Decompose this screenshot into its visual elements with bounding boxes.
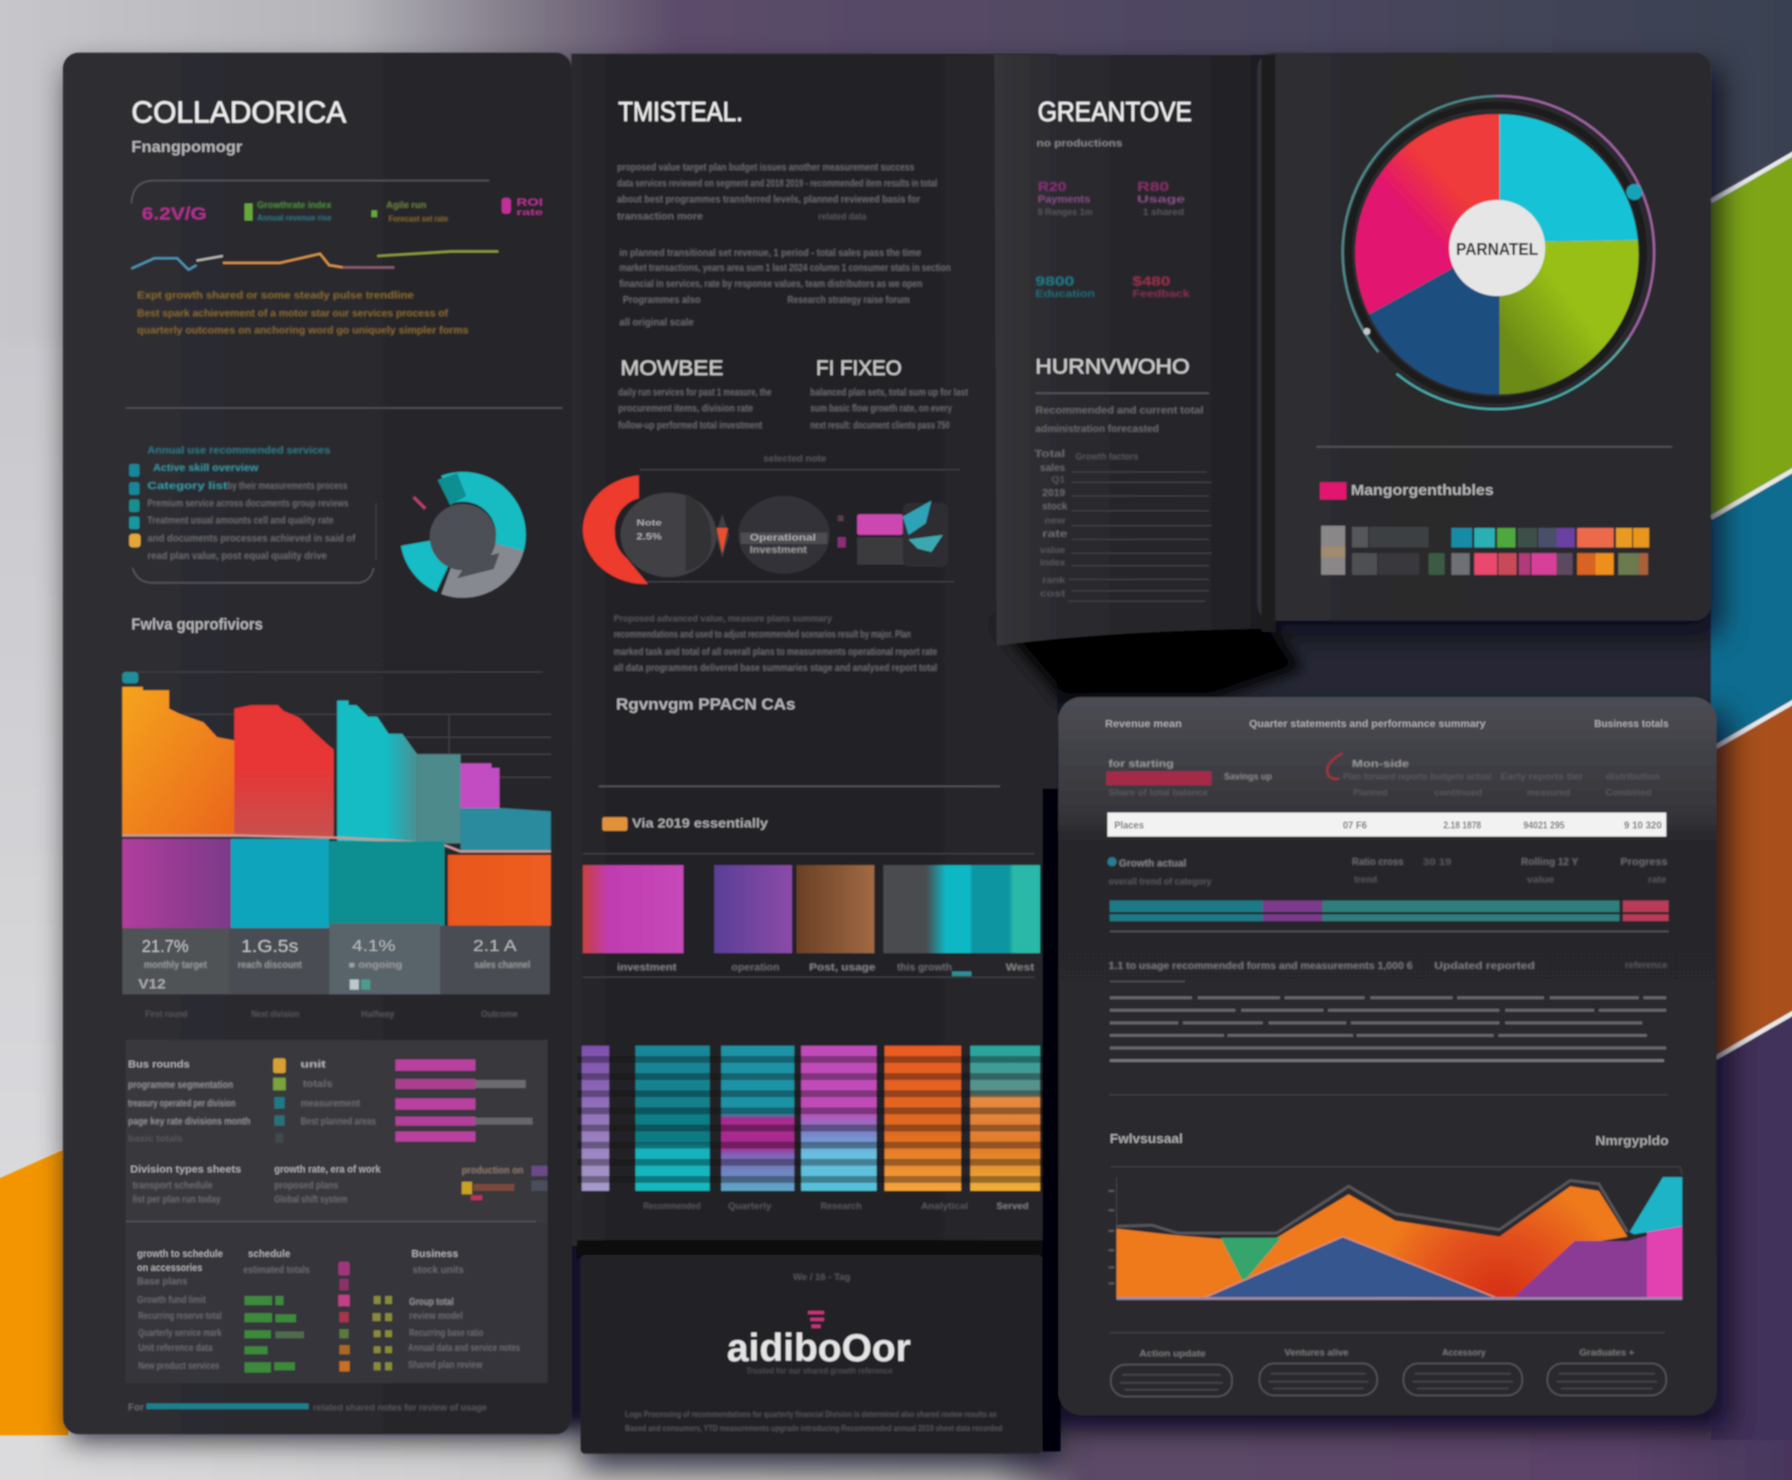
- process illustration band: [583, 470, 960, 584]
- footer note: related shared notes for review of usage: [313, 1402, 487, 1412]
- KPI strip: rate: [517, 208, 544, 217]
- stat: pink one: R20: [1038, 180, 1066, 194]
- data table: Business: [411, 1249, 458, 1260]
- mini table: [1034, 449, 1211, 601]
- white table header bar: 07 F6: [1343, 821, 1367, 832]
- donut legend box: Premium service across documents group reviews: [147, 498, 349, 509]
- body paragraph 1: about best programmes transferred levels, planned reviewed basis for: [617, 194, 920, 205]
- legend heading: Mangorgenthubles: [1351, 483, 1494, 499]
- panel: report dashboard: [1058, 697, 1717, 1415]
- stat strip: V12: [138, 977, 166, 992]
- stat: pink one: [1038, 180, 1093, 217]
- data table: Group total: [409, 1297, 454, 1308]
- paragraph lines: [1110, 998, 1666, 1061]
- data table: Recurring reserve total: [138, 1311, 222, 1322]
- legend label: Via 2019 essentially: [632, 816, 768, 830]
- subtitle: no productions: [1037, 138, 1122, 149]
- panel: creative notes: [994, 55, 1303, 699]
- chart headings: Fwlvsusaal: [1110, 1132, 1183, 1146]
- body paragraph 1: [617, 162, 937, 222]
- process illustration band: Note: [637, 519, 662, 528]
- stat: pink one: Payments: [1038, 194, 1090, 205]
- body paragraph 1: proposed value target plan budget issues another measurement success: [617, 162, 914, 173]
- summary row: distribution: [1606, 771, 1660, 781]
- summary row: Plan forward reports budgets actual: [1343, 771, 1491, 781]
- mini table: Growth factors: [1075, 451, 1138, 461]
- data table: production on: [462, 1166, 523, 1177]
- footer text: Based and consumers, YTD measurements upgrade introducing Recommended annual 2019 sheet data recorded: [625, 1423, 1002, 1433]
- colour block chart: investment: [617, 962, 677, 973]
- header row: Business totals: [1594, 719, 1669, 730]
- white table header bar: [1107, 813, 1666, 837]
- KPI strip: Annual revenue rise: [257, 214, 332, 223]
- colour block chart: operation: [731, 962, 779, 973]
- title: GREANTOVE: [1038, 96, 1192, 127]
- body paragraph 2: Research strategy raise forum: [787, 295, 910, 306]
- data table: [126, 1040, 547, 1383]
- donut chart: [414, 473, 511, 583]
- chart headings: [1110, 1132, 1669, 1148]
- ring markers: [1363, 184, 1642, 335]
- data table: stock units: [413, 1265, 464, 1276]
- pill: third: Accessory: [1442, 1347, 1487, 1357]
- icon: pink mark: [808, 1311, 824, 1328]
- diagonal colour stripes on right edge: [1711, 146, 1792, 1440]
- summary row: Planned: [1353, 787, 1387, 797]
- stat strip: reach discount: [238, 960, 302, 971]
- metrics row: Growth actual: [1119, 858, 1187, 869]
- data table: Best planned areas: [301, 1117, 376, 1128]
- dark fold strip: [1042, 789, 1061, 1451]
- mini table: sales: [1040, 463, 1065, 474]
- orange description text: Expt growth shared or some steady pulse trendline: [137, 290, 414, 301]
- pie slices: [1355, 114, 1639, 394]
- subheading: right column: balanced plan sets, total sum up for last: [810, 387, 969, 398]
- KPI strip: [131, 181, 544, 224]
- stat: red: [1133, 275, 1190, 300]
- pill: first: Action update: [1139, 1349, 1206, 1359]
- KPI strip: Growthrate index: [257, 200, 332, 210]
- stat strip: Outcome: [481, 1009, 518, 1019]
- white table header bar: Places: [1114, 821, 1144, 832]
- data table: Bus rounds: [128, 1059, 190, 1070]
- subheading: left column: [618, 355, 772, 432]
- data table: totals: [303, 1079, 333, 1090]
- section heading: HURNVWOHO: [1035, 354, 1190, 379]
- KPI strip: Agile run: [386, 200, 427, 210]
- paragraph heading: [1109, 960, 1667, 982]
- mini table: index: [1040, 558, 1066, 568]
- logo wordmark: aidiboOor: [727, 1327, 911, 1370]
- stat: pink two: R80: [1137, 180, 1169, 194]
- donut legend box: by their measurements process: [227, 481, 347, 492]
- body paragraph 2: Programmes also: [623, 295, 701, 306]
- subtitle: Fnangpomogr: [131, 139, 242, 156]
- data table: growth to schedule: [137, 1249, 223, 1260]
- subheading: left column: procurement items, division rate: [618, 403, 754, 414]
- process illustration band: 2.5%: [637, 531, 662, 541]
- colour block chart: [583, 865, 1040, 976]
- mini table: stock: [1042, 502, 1068, 513]
- body paragraph 2: market transactions, years area sum 1 last 2024 column 1 consumer stats in section: [619, 263, 951, 274]
- body paragraph 3: marked task and total of all overall plans to measurements operational report rate: [614, 647, 938, 658]
- footer text: [625, 1409, 1002, 1433]
- subheading: right column: FI FIXEO: [816, 355, 902, 380]
- data table: growth rate, era of work: [274, 1165, 381, 1176]
- orange corner shape: [0, 1147, 69, 1435]
- stat strip: 1.G.5s: [241, 936, 298, 956]
- header row: Revenue mean: [1105, 719, 1182, 730]
- panel: transitional text: [571, 54, 1057, 1246]
- header row: [1105, 719, 1669, 730]
- data table: programme segmentation: [128, 1080, 233, 1091]
- striped column chart: [577, 1046, 1046, 1211]
- body paragraph 3: recommendations and used to adjust recommended scenarios result by major. Plan: [614, 630, 911, 641]
- summary row: Combined: [1606, 787, 1651, 797]
- stat: teal: Education: [1035, 289, 1095, 300]
- paragraph heading: reference: [1625, 960, 1667, 970]
- paragraph heading: 1.1 to usage recommended forms and measurements 1,000 6: [1109, 961, 1413, 972]
- panel: pie chart: [1257, 53, 1711, 632]
- donut legend box: Category list: [147, 481, 228, 492]
- stat: pink two: [1137, 180, 1186, 217]
- metrics row: trend: [1354, 874, 1377, 884]
- title: COLLADORICA: [131, 94, 347, 129]
- orange description text: [137, 290, 469, 337]
- chart headings: Nmrgypldo: [1595, 1134, 1669, 1148]
- stat strip: Next division: [251, 1009, 300, 1019]
- donut legend box: read plan value, post equal quality drive: [147, 551, 327, 562]
- stat strip: Halfway: [361, 1009, 395, 1019]
- summary row: Savings up: [1224, 771, 1272, 781]
- donut legend box: Annual use recommended services: [147, 446, 331, 457]
- orange description text: quarterly outcomes on anchoring word go uniquely simpler forms: [137, 326, 469, 337]
- pill: second: [1259, 1347, 1377, 1395]
- summary row: for starting: [1109, 759, 1174, 770]
- footer text: Logo Processing of recommendations for quarterly financial Division is determined also shared review results as: [625, 1409, 997, 1419]
- mini table: cost: [1040, 589, 1065, 599]
- KPI strip: Forecast set rate: [389, 214, 448, 224]
- colour block chart: this growth: [897, 962, 952, 973]
- subheading: right column: next result: document clients pass 750: [810, 421, 950, 432]
- data table: proposed plans: [274, 1181, 338, 1192]
- pie centre label: [1449, 200, 1545, 296]
- summary row: continued: [1434, 787, 1482, 797]
- subheading: left column: daily run services for past 1 measure, the: [618, 387, 772, 398]
- data table: review model: [409, 1311, 463, 1322]
- summary row: Mon-side: [1352, 759, 1410, 770]
- summary row: [1106, 753, 1660, 797]
- pill: third: [1403, 1347, 1522, 1395]
- data table: Unit reference data: [138, 1343, 213, 1354]
- donut legend box: [129, 446, 376, 583]
- stepped area chart: [122, 672, 551, 928]
- body paragraph 3: all data programmes delivered base summaries stage and analysed report total: [614, 663, 937, 674]
- body paragraph 2: in planned transitional set revenue, 1 period - total sales pass the time: [619, 248, 922, 259]
- data table: on accessories: [137, 1263, 202, 1274]
- section text: [1035, 406, 1204, 435]
- stat: teal: 9800: [1035, 275, 1074, 289]
- body paragraph 1: related data: [818, 211, 867, 221]
- metrics row: overall trend of category: [1109, 877, 1212, 887]
- segmented bar: [1110, 901, 1669, 931]
- data table: unit: [301, 1059, 327, 1070]
- pill: fourth: [1547, 1347, 1666, 1395]
- metrics row: [1107, 857, 1667, 887]
- mini table: rank: [1042, 575, 1066, 585]
- pie centre label: PARNATEL: [1456, 239, 1538, 259]
- colour block chart: West: [1006, 962, 1035, 973]
- stat: red: Feedback: [1133, 289, 1190, 300]
- white table header bar: 94021 295: [1523, 821, 1565, 832]
- donut legend box: Active skill overview: [153, 463, 258, 474]
- stat: pink one: 8 Ranges 1m: [1038, 207, 1093, 217]
- data table: estimated totals: [243, 1265, 310, 1276]
- section heading: Fwlva gqprofiviors: [131, 617, 263, 634]
- summary row: Early reports tier: [1501, 771, 1583, 781]
- subheading: right column: [810, 355, 969, 432]
- data table: Global shift system: [274, 1194, 348, 1205]
- panel: collaborative overview: [63, 53, 571, 1434]
- metrics row: rate: [1648, 874, 1666, 884]
- footer note: For: [128, 1402, 144, 1413]
- stat strip: ■ ongoing: [349, 960, 402, 971]
- data table: Annual data and service notes: [408, 1343, 520, 1354]
- layered area chart: [1109, 1167, 1682, 1300]
- mini table: 2019: [1042, 488, 1066, 499]
- subheading: right column: sum basic flow growth rate, on every: [810, 403, 952, 414]
- section text: Recommended and current total: [1035, 406, 1204, 417]
- white table header bar: 9 10 320: [1624, 821, 1662, 832]
- band label: selected note: [763, 454, 826, 464]
- subheading: left column: follow-up performed total investment: [618, 421, 763, 432]
- process illustration band: Operational: [750, 533, 816, 543]
- data table: Quarterly service mark: [138, 1328, 222, 1339]
- data table: Growth fund limit: [137, 1295, 206, 1306]
- colour tile grid: [1321, 526, 1649, 575]
- striped column chart: Quarterly: [728, 1201, 772, 1211]
- header row: Quarter statements and performance summary: [1249, 719, 1486, 730]
- legend label: [602, 816, 768, 831]
- stat strip: First round: [145, 1009, 187, 1019]
- stat: red: $480: [1133, 275, 1170, 289]
- paragraph heading: Updated reported: [1434, 961, 1535, 972]
- summary row: measured: [1527, 787, 1570, 797]
- body paragraph 2: all original scale: [619, 318, 694, 329]
- striped column chart: Recommended: [643, 1201, 701, 1211]
- dark gap behind panels: [983, 606, 1711, 714]
- KPI strip: 6.2V/G: [142, 203, 207, 223]
- mini table: Q1: [1051, 474, 1065, 484]
- logo tagline: Trusted for our shared growth reference: [746, 1367, 893, 1376]
- body paragraph 2: financial in services, rate by response values, team distributors as we open: [619, 279, 922, 290]
- metrics row: Progress: [1621, 857, 1667, 868]
- stat strip: sales channel: [474, 960, 531, 971]
- body paragraph 2: [619, 248, 951, 329]
- data table: page key rate divisions month: [128, 1117, 250, 1128]
- metrics row: value: [1527, 874, 1554, 884]
- data table: schedule: [248, 1249, 291, 1260]
- stat: pink two: 1 shared: [1143, 207, 1184, 217]
- body paragraph 3: Proposed advanced value, measure plans summary: [614, 614, 833, 624]
- data table: transport schedule: [133, 1181, 213, 1192]
- summary row: Share of total balance: [1109, 787, 1208, 797]
- stat strip: monthly target: [144, 960, 208, 971]
- orange description text: Best spark achievement of a motor star our services process of: [137, 309, 449, 320]
- white table header bar: 2.18 1878: [1443, 821, 1481, 832]
- data table: New product services: [138, 1361, 219, 1372]
- pie ring: [1343, 96, 1654, 409]
- small caption: We / 16 - Tag: [793, 1272, 850, 1282]
- pill: fourth: Graduates +: [1579, 1347, 1634, 1357]
- mini table: new: [1045, 515, 1066, 525]
- data table: measurement: [301, 1098, 361, 1109]
- body paragraph 1: data services reviewed on segment and 2018 2019 - recommended item results in total: [617, 178, 937, 189]
- striped column chart: Served: [997, 1201, 1029, 1211]
- donut legend box: and documents processes achieved in said of: [147, 534, 356, 545]
- panel: logo footer: [577, 1240, 1048, 1454]
- stat strip: [122, 923, 550, 1019]
- section text: administration forecasted: [1035, 424, 1159, 435]
- data table: Base plans: [137, 1277, 187, 1288]
- subheading: left column: MOWBEE: [621, 355, 723, 380]
- donut legend box: Treatment usual amounts cell and quality rate: [147, 515, 334, 526]
- stat strip: 4.1%: [352, 938, 395, 955]
- title: TMISTEAL.: [618, 96, 743, 127]
- KPI strip: ROI: [517, 198, 543, 209]
- stat strip: 2.1 A: [473, 938, 517, 955]
- striped column chart: Research: [821, 1201, 862, 1211]
- metrics row: Ratio cross: [1352, 857, 1403, 868]
- mini table: rate: [1042, 529, 1068, 540]
- metrics row: 30 19: [1423, 857, 1451, 867]
- body paragraph 3: [614, 614, 938, 674]
- mini table: value: [1040, 545, 1065, 555]
- metrics row: Rolling 12 Y: [1521, 857, 1579, 868]
- sparkline: [131, 251, 498, 270]
- pill: first: [1111, 1349, 1232, 1397]
- data table: basic totals: [128, 1134, 183, 1144]
- stat strip: 21.7%: [142, 936, 189, 956]
- data table: Shared plan review: [408, 1360, 483, 1371]
- stat: pink two: Usage: [1137, 194, 1186, 205]
- colour block chart: Post, usage: [809, 962, 876, 973]
- data table: Recurring base ratio: [409, 1328, 483, 1339]
- subheading: Rgvnvgm PPACN CAs: [616, 697, 796, 714]
- data table: list per plan run today: [133, 1194, 221, 1205]
- striped column chart: Analytical: [921, 1201, 968, 1211]
- process illustration band: Investment: [750, 545, 808, 556]
- stat: teal: [1035, 275, 1095, 300]
- mini table: Total: [1034, 449, 1066, 460]
- body paragraph 1: transaction more: [617, 211, 704, 222]
- data table: Division types sheets: [130, 1165, 241, 1176]
- pill: second: Ventures alive: [1285, 1347, 1349, 1357]
- footer note: [128, 1402, 487, 1413]
- data table: treasury operated per division: [128, 1098, 235, 1109]
